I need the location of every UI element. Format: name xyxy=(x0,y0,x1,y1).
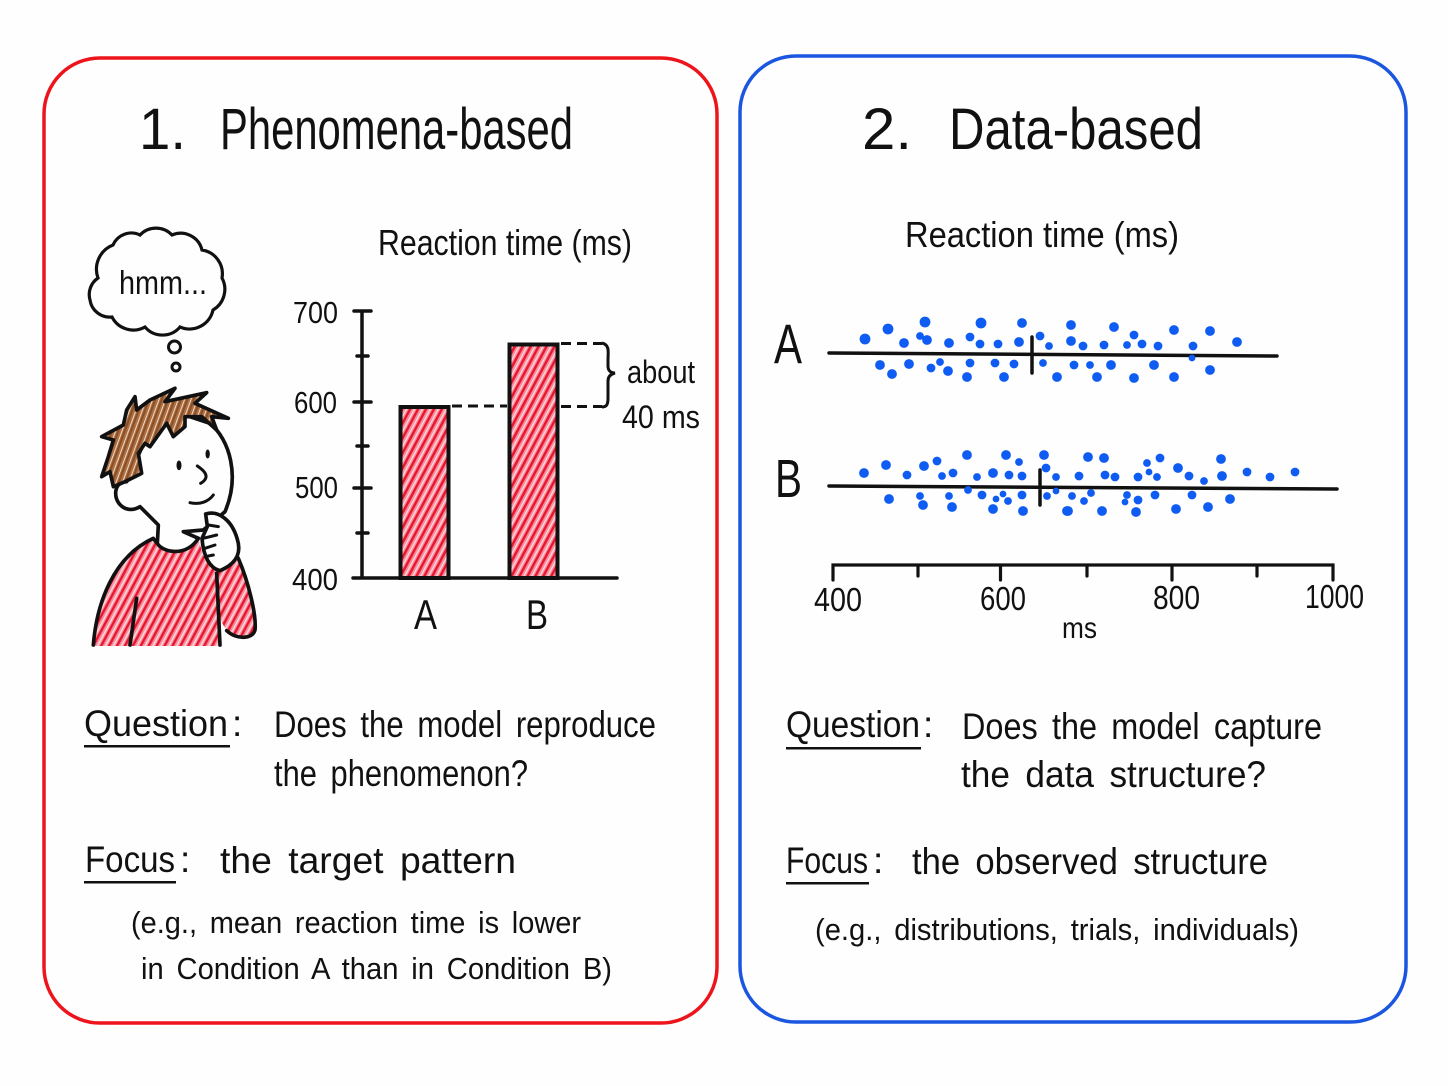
bar B xyxy=(510,344,558,578)
difference annotation: about xyxy=(627,354,695,390)
focus text: (e.g., distributions, trials, individuals) xyxy=(815,912,1299,947)
x axis: ms scale: 400 xyxy=(814,581,862,618)
focus text: the observed structure xyxy=(912,841,1268,882)
illustration: thinking person xyxy=(93,388,255,646)
y axis labels: 600 xyxy=(294,385,337,420)
question text: Question xyxy=(84,703,228,744)
question text: : xyxy=(923,704,933,745)
focus text: the target pattern xyxy=(220,840,516,881)
head xyxy=(116,410,232,551)
bar chart xyxy=(292,222,700,638)
question text xyxy=(786,704,1322,795)
question text: the phenomenon? xyxy=(274,753,528,794)
title: 2. Data-based xyxy=(862,97,1203,162)
title: 2. Data-based: 2. xyxy=(862,97,912,162)
title: 1. Phenomena-based xyxy=(139,97,573,162)
x axis labels: A xyxy=(414,591,437,638)
x axis labels xyxy=(414,591,548,638)
title: 1. Phenomena-based: 1. xyxy=(139,97,186,162)
axes xyxy=(353,311,617,578)
dot plot row B xyxy=(775,449,1337,516)
focus text: in Condition A than in Condition B) xyxy=(141,951,612,986)
x axis: ms scale: ms xyxy=(1062,612,1097,645)
x axis: ms scale: 1000 xyxy=(1305,578,1364,615)
panel: data-based xyxy=(740,56,1406,1022)
y axis labels: 400 xyxy=(292,562,338,597)
focus text: : xyxy=(873,840,883,881)
thought bubble: hmm... xyxy=(119,264,207,301)
focus text xyxy=(84,839,612,986)
x axis: ms scale: 800 xyxy=(1153,579,1200,616)
focus text: (e.g., mean reaction time is lower xyxy=(131,905,581,940)
focus text: Focus xyxy=(85,839,175,880)
bar A xyxy=(400,407,448,578)
sweater xyxy=(93,538,255,646)
chart title: Reaction time (ms) xyxy=(378,222,632,263)
focus text xyxy=(786,840,1299,947)
title: 1. Phenomena-based: Phenomena-based xyxy=(220,97,573,162)
question text: Does the model capture xyxy=(962,706,1322,747)
face xyxy=(177,450,213,503)
x axis labels: B xyxy=(526,591,548,638)
dot plot row B: B xyxy=(775,449,802,509)
hair xyxy=(102,388,228,487)
question text: Question xyxy=(786,704,920,745)
dot plot row A xyxy=(774,312,1277,382)
panel: phenomena-based xyxy=(44,58,717,1023)
question text: : xyxy=(232,703,242,744)
focus text: : xyxy=(180,839,190,880)
x axis: ms scale xyxy=(814,565,1364,645)
dot plot row A: A xyxy=(774,312,802,375)
question text: the data structure? xyxy=(961,754,1266,795)
hand xyxy=(202,513,239,571)
question text: Does the model reproduce xyxy=(274,704,656,745)
difference annotation xyxy=(452,343,700,435)
dot plot title: Reaction time (ms) xyxy=(905,214,1179,255)
difference annotation: 40 ms xyxy=(622,399,700,435)
x axis: ms scale: 600 xyxy=(980,580,1026,617)
thought bubble xyxy=(89,228,225,371)
y axis labels: 700 xyxy=(293,295,338,330)
y axis labels xyxy=(292,295,338,597)
y axis labels: 500 xyxy=(295,470,338,505)
question text xyxy=(84,703,656,794)
focus text: Focus xyxy=(786,840,868,881)
title: 2. Data-based: Data-based xyxy=(949,97,1203,162)
